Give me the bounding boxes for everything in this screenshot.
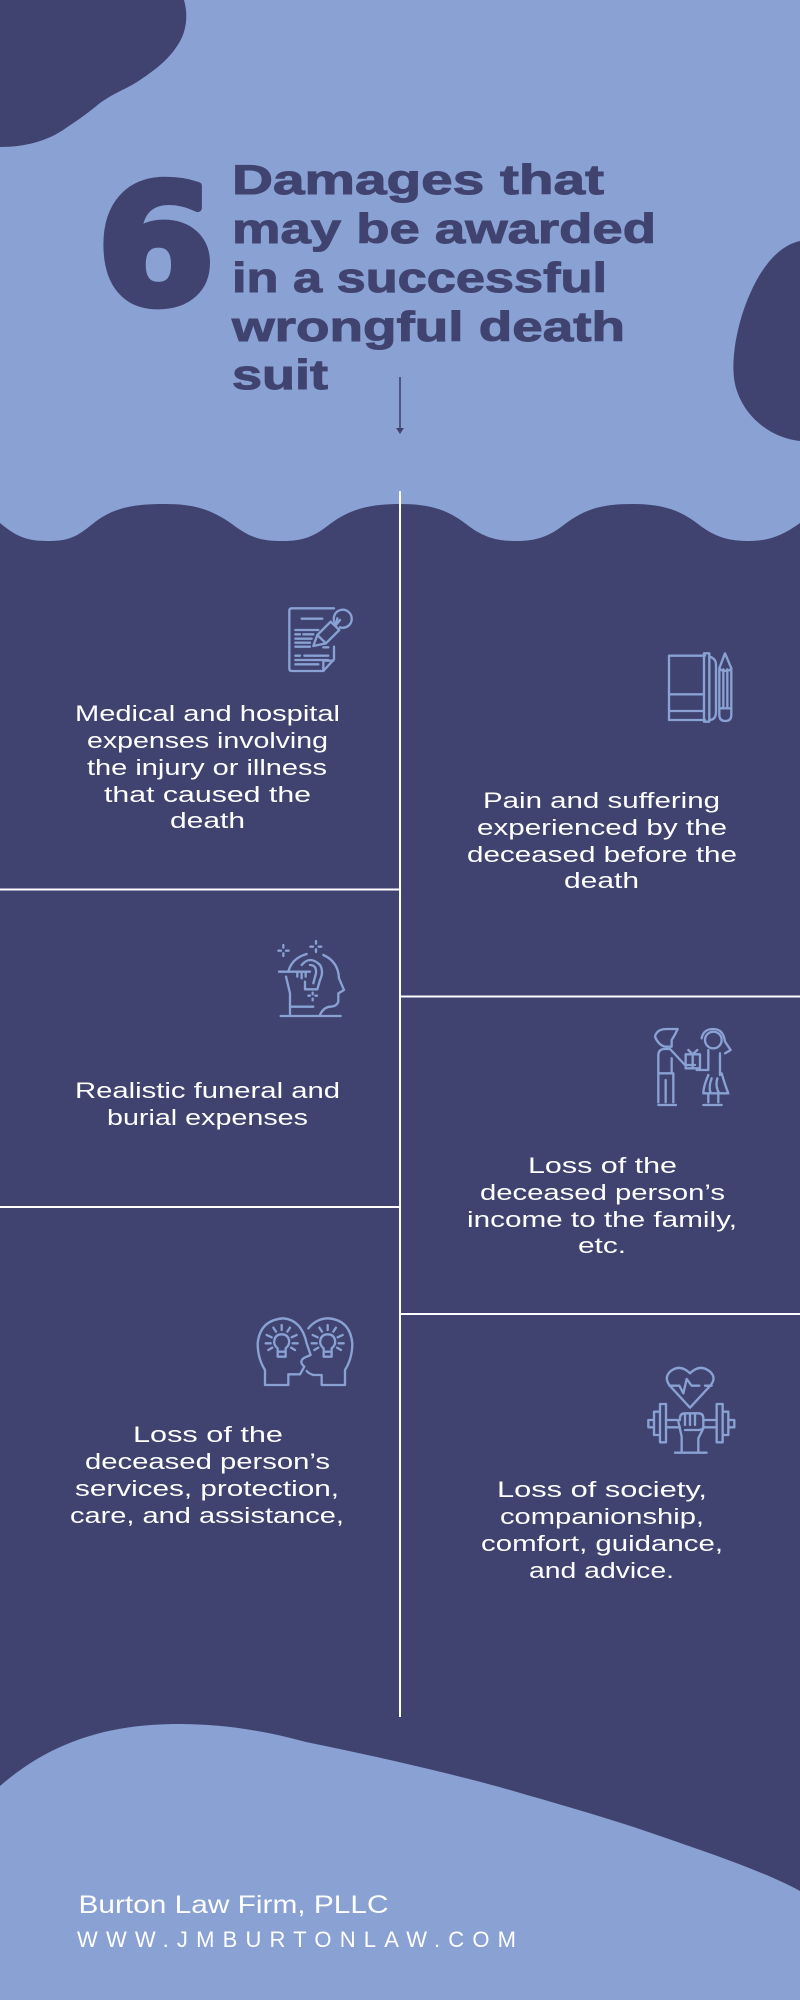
- title: Damages that: [232, 156, 604, 203]
- text: loss of services: Loss of the: [133, 1422, 283, 1447]
- big numeral 6: 6: [97, 150, 215, 342]
- text: loss of society: [481, 1477, 723, 1583]
- text: loss of society: Loss of society,: [497, 1477, 707, 1502]
- text: loss of services: [70, 1422, 344, 1528]
- text: pain and suffering: deceased before the: [467, 842, 737, 867]
- footer: website: WWW.JMBURTONLAW.COM: [77, 1927, 516, 1952]
- arrow: down: [396, 377, 404, 434]
- text: medical and hospital expenses: that caused the: [104, 782, 311, 807]
- text: loss of income: Loss of the: [528, 1153, 677, 1178]
- icon: two people exchanging gift: [655, 1029, 731, 1105]
- text: loss of income: etc.: [578, 1233, 626, 1258]
- blob: top left: [0, 0, 186, 147]
- text: pain and suffering: [467, 788, 737, 893]
- text: loss of services: care, and assistance,: [70, 1503, 344, 1528]
- text: loss of income: [467, 1153, 737, 1258]
- blob: right: [733, 241, 800, 441]
- text: funeral and burial expenses: [75, 1078, 340, 1130]
- title: [231, 156, 656, 398]
- text: medical and hospital expenses: expenses involving: [87, 728, 328, 753]
- text: loss of society: and advice.: [529, 1558, 674, 1583]
- text: medical and hospital expenses: Medical and hospital: [75, 701, 340, 726]
- title: in a successful: [232, 254, 607, 301]
- dark panel with wavy top: [0, 504, 800, 2000]
- text: loss of income: deceased person’s: [480, 1180, 725, 1205]
- text: pain and suffering: death: [564, 868, 639, 893]
- text: loss of services: deceased person’s: [85, 1449, 330, 1474]
- text: pain and suffering: Pain and suffering: [483, 788, 720, 813]
- bottom light shape: [0, 1724, 800, 2000]
- text: loss of society: companionship,: [500, 1504, 704, 1529]
- divider lines: [0, 491, 800, 1717]
- icon: notebook and pencil: [669, 653, 731, 722]
- footer: firm name: Burton Law Firm, PLLC: [78, 1891, 388, 1919]
- text: medical and hospital expenses: the injury or illness: [87, 755, 327, 780]
- title: wrongful death: [231, 303, 625, 350]
- text: pain and suffering: experienced by the: [477, 815, 727, 840]
- title: may be awarded: [232, 205, 656, 252]
- text: loss of services: services, protection,: [75, 1476, 339, 1501]
- icon: two heads with light bulbs: [258, 1318, 352, 1385]
- text: funeral and burial expenses: Realistic funeral and: [75, 1078, 340, 1103]
- icon: heart and dumbbell: [648, 1368, 734, 1453]
- text: medical and hospital expenses: [75, 701, 340, 833]
- text: funeral and burial expenses: burial expenses: [107, 1105, 308, 1130]
- icon: document and pen: [289, 608, 352, 671]
- icon: head with key: [278, 941, 344, 1016]
- text: loss of income: income to the family,: [467, 1207, 737, 1232]
- text: loss of society: comfort, guidance,: [481, 1531, 723, 1556]
- text: medical and hospital expenses: death: [170, 808, 245, 833]
- title: suit: [232, 351, 328, 398]
